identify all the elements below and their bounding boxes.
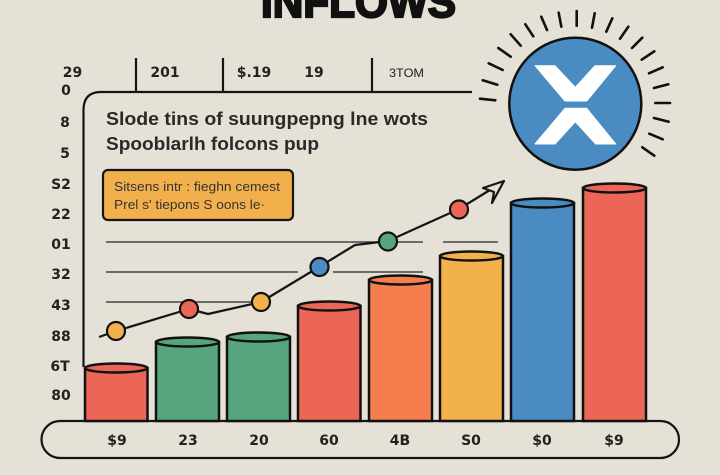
y axis labels: 32 bbox=[51, 267, 71, 283]
x axis pill: 4B bbox=[390, 433, 410, 449]
callout: orange note: Sitsens intr : fieghn cemest bbox=[114, 180, 281, 194]
bar 5 bbox=[369, 276, 432, 421]
trend markers bbox=[107, 200, 468, 340]
y axis labels: 88 bbox=[51, 329, 71, 345]
x axis pill: 23 bbox=[178, 433, 198, 449]
top header values: 201 bbox=[150, 65, 180, 81]
bar 6 bbox=[440, 252, 503, 421]
bar 7 bbox=[511, 198, 574, 421]
icon: blue X coin bbox=[509, 38, 641, 170]
top header values bbox=[63, 65, 424, 81]
y axis labels: S2 bbox=[51, 177, 71, 193]
panel: chart frame bbox=[84, 58, 472, 367]
bar 4 bbox=[298, 302, 360, 421]
trend line with arrow bbox=[99, 181, 504, 337]
x axis pill: S0 bbox=[461, 433, 481, 449]
y axis labels: 6T bbox=[50, 359, 70, 375]
bar 2 bbox=[156, 338, 219, 421]
subtitle text: Spooblarlh folcons pup bbox=[106, 134, 319, 154]
subtitle text: Slode tins of suungpepng lne wots bbox=[106, 109, 428, 129]
top header values: 19 bbox=[304, 65, 324, 81]
y axis labels: 8 bbox=[60, 115, 70, 131]
bar chart bbox=[85, 184, 646, 421]
x axis pill bbox=[42, 421, 679, 458]
bar 1 bbox=[85, 364, 148, 421]
y axis labels: 43 bbox=[51, 298, 71, 314]
subtitle text bbox=[106, 109, 428, 154]
y axis labels: 01 bbox=[51, 237, 71, 253]
bar 3 bbox=[227, 332, 290, 421]
callout: orange note: Prel s' tiepons S oons le· bbox=[114, 198, 265, 212]
top header values: 29 bbox=[63, 65, 82, 81]
y axis labels: 80 bbox=[51, 388, 71, 404]
x axis pill: $9 bbox=[604, 433, 624, 449]
x axis pill: $0 bbox=[532, 433, 552, 449]
y axis labels: 0 bbox=[61, 83, 71, 99]
x axis pill: 20 bbox=[249, 433, 269, 449]
icon: sun rays bbox=[480, 11, 670, 156]
callout: orange note bbox=[103, 170, 293, 220]
y axis labels: 22 bbox=[51, 207, 71, 223]
x axis pill: 60 bbox=[319, 433, 339, 449]
y axis labels bbox=[50, 83, 71, 404]
top header values: $.19 bbox=[237, 65, 271, 81]
y axis labels: 5 bbox=[60, 146, 70, 162]
bar 8 bbox=[583, 184, 646, 421]
grid lines bbox=[106, 242, 498, 302]
top header values: 3TOM bbox=[389, 68, 424, 80]
x axis pill: $9 bbox=[107, 433, 127, 449]
